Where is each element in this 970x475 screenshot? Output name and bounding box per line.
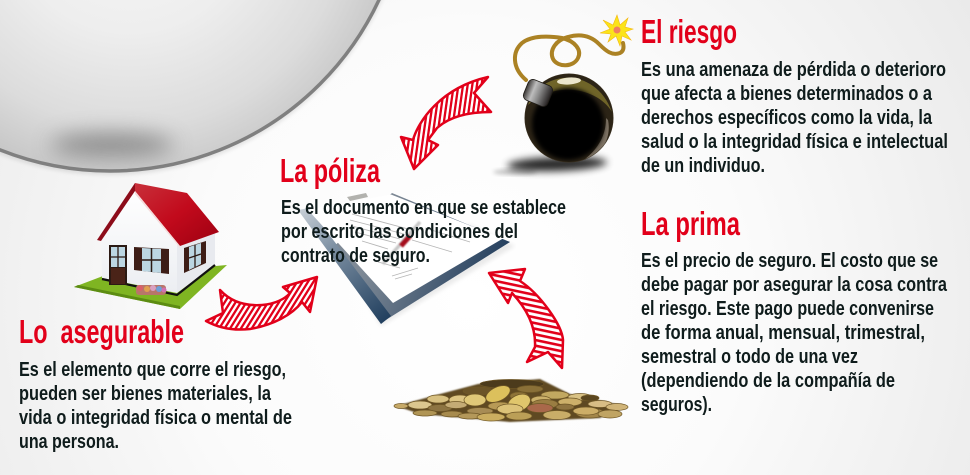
text block: Lo asegurable: pueden ser bienes materiales, la: [19, 383, 272, 405]
flowers: [136, 285, 166, 295]
text block: La prima: (dependiendo de la compañía de: [641, 370, 895, 392]
text block: La prima: [641, 250, 948, 416]
text block: Lo asegurable: vida o integridad física o mental de: [19, 407, 292, 429]
text block: Lo asegurable: Es el elemento que corre el riesgo,: [19, 359, 286, 381]
heading: La prima: La prima: [641, 205, 740, 242]
icon: house: [74, 183, 227, 309]
door: [109, 245, 127, 285]
heading: La póliza: La póliza: [280, 152, 380, 189]
text block: Lo asegurable: [19, 359, 292, 453]
text block: La póliza: por escrito las condiciones del: [281, 221, 518, 243]
icon: clipboard with policy document: [298, 193, 515, 326]
icon: pile of coins: [394, 379, 628, 422]
heading: Lo asegurable: Lo asegurable: [19, 313, 184, 350]
text block: La prima: semestral o todo de una vez: [641, 346, 858, 368]
panel: El riesgo: [641, 13, 948, 177]
text block: Lo asegurable: una persona.: [19, 431, 119, 453]
arrow: premium to policy: [489, 269, 563, 368]
panel: La prima: [641, 205, 948, 416]
panel: La póliza: [280, 152, 566, 267]
decorative grey disc: [0, 0, 409, 175]
text block: La póliza: [281, 197, 566, 267]
arrow: risk to policy: [401, 77, 491, 169]
text block: El riesgo: [641, 59, 948, 177]
text block: La prima: seguros).: [641, 394, 712, 416]
side window: [184, 241, 206, 273]
panel: Lo asegurable: [19, 313, 292, 453]
text block: La póliza: contrato de seguro.: [281, 245, 430, 267]
arrow: insurable to policy: [206, 277, 317, 330]
text block: El riesgo: de un individuo.: [641, 155, 765, 177]
icon: bomb: [493, 15, 633, 175]
spark: [600, 15, 633, 46]
front window: [134, 247, 169, 274]
fuse cap: [522, 78, 554, 108]
heading: El riesgo: El riesgo: [641, 13, 737, 50]
fuse: [515, 35, 624, 80]
text block: La póliza: Es el documento en que se establece: [281, 197, 566, 219]
